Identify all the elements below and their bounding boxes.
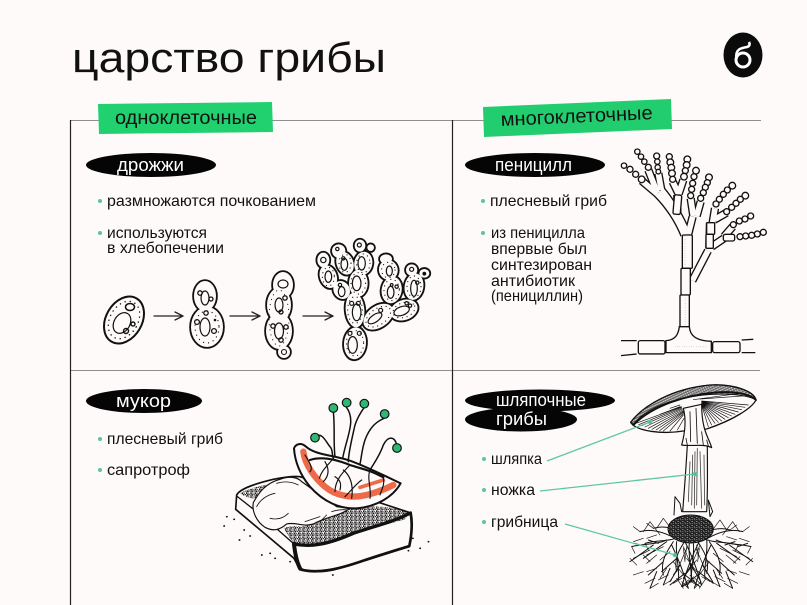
text: yeast facts [98, 193, 316, 257]
text: mushroom parts [482, 451, 558, 531]
heading: yeast [86, 153, 216, 177]
fruit slice [294, 444, 401, 508]
stalks [315, 407, 397, 470]
cap [631, 385, 756, 432]
text: mucor facts [98, 431, 223, 479]
heading: cap mushrooms: грибы [496, 409, 547, 429]
gills [636, 393, 748, 431]
text: mushroom parts: ножка [491, 482, 535, 499]
text: mucor facts: плесневый гриб [107, 431, 223, 448]
text: penicillium facts: впервые был [491, 241, 587, 258]
bulb [668, 515, 713, 543]
illustration: penicillium [621, 149, 766, 356]
veins [310, 458, 383, 477]
stem [683, 445, 707, 512]
illustration: moldy bread [224, 398, 429, 575]
logo [724, 32, 762, 78]
roots [630, 522, 700, 588]
arrow [303, 312, 333, 320]
text: penicillium facts: из пеницилла [491, 225, 585, 242]
crumbs [224, 517, 429, 575]
panel: unicellular heading: одноклеточные [115, 107, 257, 129]
panel: unicellular heading [98, 102, 273, 134]
text: yeast facts: используются [107, 225, 207, 242]
bread body [236, 476, 412, 572]
leader lines [540, 420, 697, 557]
butter blob [253, 477, 350, 530]
text: mushroom parts: грибница [491, 514, 558, 531]
panel: mucor [86, 389, 429, 575]
heading: penicillium [465, 153, 605, 177]
heading: cap mushrooms [465, 390, 615, 432]
heading: yeast: дрожжи [117, 155, 184, 175]
text: penicillium facts: синтезирован [491, 257, 592, 274]
volva [674, 497, 713, 517]
text: penicillium facts [481, 193, 607, 305]
panel: multicellular heading [483, 99, 672, 137]
sporangia [311, 398, 401, 452]
text: mucor facts: сапротроф [107, 462, 190, 479]
panel: multicellular heading: многоклеточные [500, 102, 653, 131]
illustration: mushroom [630, 385, 756, 588]
heading: mucor [86, 389, 202, 413]
heading: penicillium: пеницилл [495, 155, 572, 175]
panel: cap mushrooms [465, 385, 756, 588]
text: yeast facts: размножаются почкованием [107, 193, 316, 210]
text: yeast facts: в хлебопечении [107, 240, 224, 257]
heading: cap mushrooms: шляпочные [496, 390, 586, 410]
text: penicillium facts: антибиотик [491, 273, 576, 290]
heading: mucor: мукор [116, 391, 171, 411]
title: царство грибы [72, 34, 386, 81]
arrow [154, 312, 183, 320]
ring [682, 404, 712, 448]
text: penicillium facts: плесневый гриб [490, 193, 607, 210]
panel: yeast [86, 153, 429, 360]
panel: penicillium [465, 149, 766, 356]
arrow [230, 312, 260, 320]
text: mushroom parts: шляпка [491, 451, 542, 468]
illustration: yeast budding [96, 240, 429, 360]
text: penicillium facts: (пенициллин) [491, 288, 583, 305]
grid frame [70, 120, 761, 605]
